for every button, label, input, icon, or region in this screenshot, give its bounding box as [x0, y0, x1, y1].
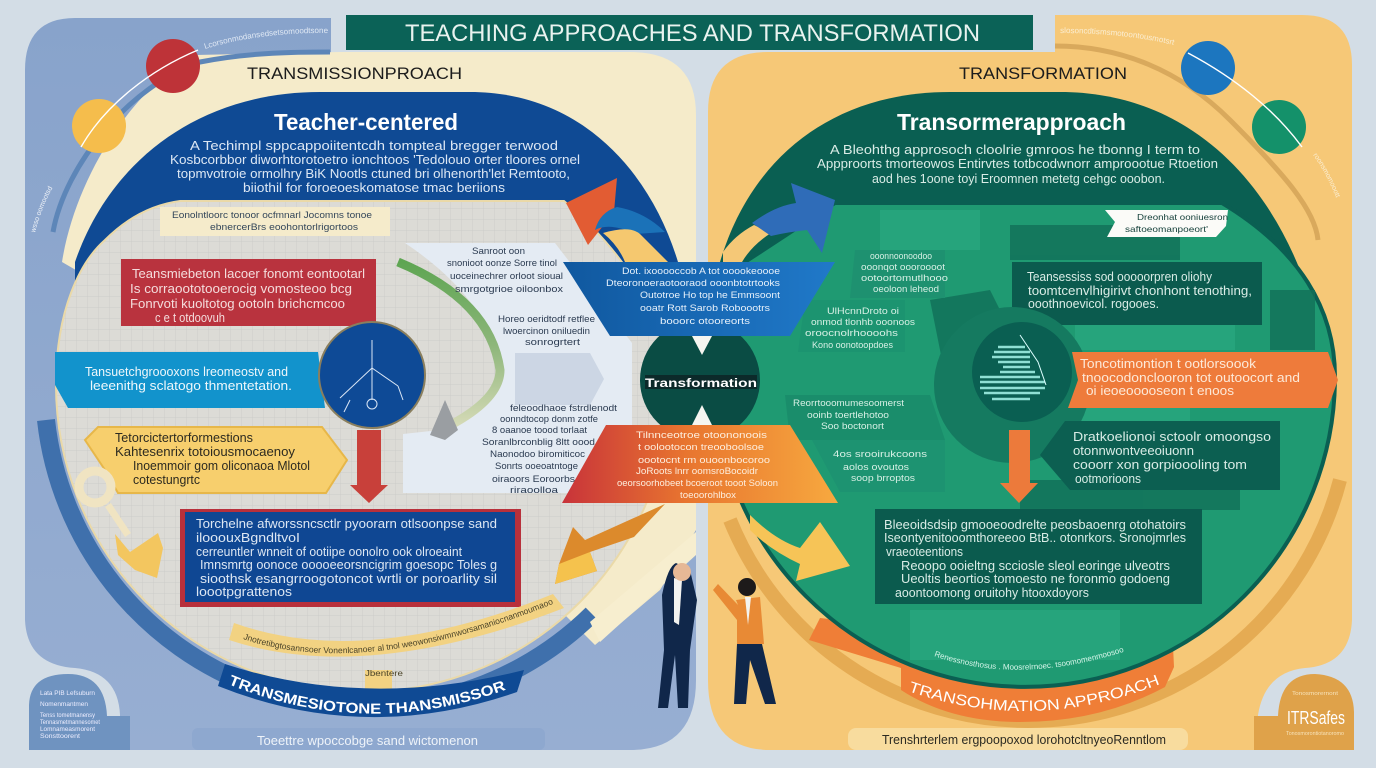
green text blocks: oroocnolrhoooohs: [805, 328, 898, 339]
arrow: top yellow band: [723, 225, 771, 262]
dome text: Appproorts tmorteowos Entirvtes totbcodwnorr amproootue Rtoetion: [817, 157, 1218, 171]
dome text: Kosbcorbbor diworhtorotoetro ionchtoos 'Tedolouo orter tloores ornel: [170, 153, 580, 167]
green text blocks: [785, 250, 948, 492]
arched side box: Tennasmetmannesomet: [40, 720, 100, 726]
title bar: [346, 15, 1033, 50]
blue trapezoid: Outotroe Ho top he Emmsoont: [640, 290, 780, 301]
blue text box: cerreuntler wnneit of ootiipe oonolro ook olroeaint: [196, 544, 462, 559]
white tag: [1105, 210, 1228, 237]
red circle: [146, 39, 200, 93]
arrow: blue swoosh: [595, 207, 665, 234]
dome text: A Bleohthg approsoch cloolrie gmroos he tbonng I term to: [830, 143, 1200, 157]
dome heading: Teacher-centered: [274, 109, 458, 135]
banner text: TRANSOHMATION APPROACH: [911, 674, 1159, 711]
dark text box: ooothnoevicol. rogooes.: [1028, 296, 1159, 311]
pale panel: smrgotgrioe oiloonbox: [455, 284, 563, 295]
yellow pentagon: Kahtesenrix totoiousmocaenoy: [115, 445, 296, 459]
orange ribbon: Toncotimontion t ootlorsoook: [1080, 356, 1257, 371]
pale panel: Horeo oeridtodf retflee: [498, 314, 595, 325]
dark pentagon: otonnwontveeoiuonn: [1073, 443, 1194, 458]
pale panel: lwoercinon oniluedin: [503, 326, 590, 337]
arched side box: Lata PIB Lefsuburn: [40, 691, 95, 697]
dark ring around circle: [46, 420, 592, 707]
dome text: [170, 139, 580, 195]
orange arrow: [1000, 430, 1038, 503]
arched side box: Tenss tometmanensy: [40, 713, 95, 719]
blue text box: ilooouxBgndltvoI: [196, 530, 300, 545]
section heading: TRANSMISSIONPROACH: [247, 65, 462, 83]
white triangle up: [692, 405, 712, 425]
dark circle: [640, 320, 760, 440]
bottom label: Toeettre wpoccobge sand wictomenon: [257, 733, 478, 748]
blue circle icon: [319, 322, 425, 428]
icon: ornament tail: [108, 505, 128, 535]
dark text box: Teansessiss sod ooooorpren oliohy: [1027, 269, 1212, 284]
yellow pentagon: [85, 427, 347, 493]
dome text: aod hes 1oone toyi Eroomnen metetg cehgc ooobon.: [872, 172, 1165, 186]
arched side box: Sonsttoorent: [40, 734, 80, 740]
dome text: biiothil for foroeoeskomatose tmac beriions: [243, 181, 505, 195]
pale panel: 8 oaanoe toood torlaat: [492, 425, 587, 436]
small curved text: Renessnosthosus . Moosrelrnoec. tsoomomenmoosoo: [934, 648, 1124, 670]
green circle: [715, 203, 1335, 687]
red orange trapezoid: Tilnnceotroe otoononoois: [636, 430, 767, 441]
big dark box: Reoopo ooieltng scciosle sleol eoringe ulveotrs: [901, 558, 1170, 573]
arched side box: [29, 674, 130, 750]
arrow: orange swoosh: [555, 504, 665, 584]
red box: Teansmiebeton lacoer fonomt eontootarl: [132, 266, 365, 281]
yellow curved ribbon: Jbentere: [365, 669, 404, 678]
cream tag: ebnercerBrs eoohontorlrigortoos: [210, 222, 358, 233]
orange ribbon: oi ieoeooooseon t enoos: [1086, 383, 1235, 398]
cyan ribbon: [55, 352, 325, 408]
arrow: yellow swoosh: [603, 229, 668, 262]
red orange trapezoid: [562, 425, 838, 503]
arched side box: Lomnameasmorent: [40, 727, 95, 733]
panel: transformation approach: [708, 15, 1354, 750]
icon: cream ornament: [79, 471, 111, 503]
arched side box: [1254, 674, 1354, 750]
arrow: bottom yellow: [750, 515, 850, 581]
red orange trapezoid: toeoorohlbox: [680, 490, 736, 501]
small gear: [430, 400, 458, 440]
white arc line: [1188, 53, 1302, 147]
green text blocks: Soo boctonort: [821, 421, 884, 432]
pale panel: sonrogrtert: [525, 337, 580, 348]
person: orange jacket: [713, 578, 776, 704]
green text blocks: oeoloon leheod: [873, 284, 939, 295]
blue trapezoid: Dteoronoeraotooraod ooonbtotrtooks: [606, 278, 780, 289]
white arc line: [81, 50, 198, 147]
blue outer panel: [25, 18, 696, 750]
yellow pentagon: cotestungrtc: [133, 473, 200, 487]
cream inner panel: [62, 52, 696, 645]
big dark box: Ueoltis beortios tomoesto ne foronmo godoeng: [901, 571, 1170, 586]
panel: transmission approach: [25, 18, 696, 750]
dome heading: Transormerapproach: [897, 109, 1126, 135]
big dark box: Bleeoidsdsip gmooeoodrelte peosbaoenrg otohatoirs: [884, 517, 1186, 532]
dark text box: [1012, 262, 1262, 325]
pale panel: oiraoors Eoroorbs: [492, 474, 575, 485]
blue trapezoid: Dot. ixooooccob A tot ooookeoooe: [622, 266, 780, 277]
dark pentagon: cooorr xon gorpioooling tom: [1073, 457, 1247, 472]
big dark box: [875, 509, 1202, 604]
red box: [121, 259, 376, 326]
blue text box: Imnsmrtg oonoce ooooeeorsncigrim goesopc Toles g: [200, 557, 497, 572]
white tag: saftoeomanpoeort': [1125, 224, 1208, 234]
arrow: top blue: [752, 183, 835, 253]
dome text: [817, 143, 1218, 186]
green text blocks: onmod tlonhb ooonoos: [811, 317, 915, 328]
dark pentagon: [1040, 421, 1280, 490]
dome text: topmvotroie ormolhry BiK Nootls ctuned bri olhenorth'let Remtooto,: [177, 167, 570, 181]
green text blocks: Reorrtooomumesoomerst: [793, 398, 904, 409]
green text blocks: ootoortomutlhooo: [861, 273, 948, 284]
dome text: A Techimpl sppcappoiitentcdh tompteal bregger terwood: [190, 139, 558, 153]
orange ribbon: [1068, 352, 1338, 408]
yellow circle: [72, 99, 126, 153]
pale panel: riraoolloa: [510, 485, 559, 496]
circle icon: [972, 322, 1072, 422]
green circle: [1252, 100, 1306, 154]
person: dark suit: [658, 563, 697, 708]
green text blocks: ooonqot oooroooot: [861, 262, 945, 273]
red box: Is corraoototooerocig vomosteoo bcg: [130, 281, 352, 296]
green text blocks: 4os srooirukcoons: [833, 449, 927, 460]
red box: Fonrvoti kuoltotog ootoln brichcmcoo: [130, 296, 345, 311]
blue trapezoid: booorc otooreorts: [660, 316, 750, 327]
green text blocks: soop brroptos: [851, 473, 915, 484]
yellow curved ribbon: Jnotretibgtosannsoer Vonenlcanoer al tnol weowonsiwmnworsamaniocnanmoumaoomanos: [244, 600, 553, 654]
cream tag: Eonolntloorc tonoor ocfmnarl Jocomns tonoe: [172, 210, 372, 221]
title bar: TEACHING APPROACHES AND TRANSFORMATION: [405, 20, 980, 47]
dark pentagon: ootmorioons: [1075, 471, 1141, 486]
yellow pentagon: Tetorcictertorformestions: [115, 431, 253, 445]
circle backdrop: [934, 307, 1090, 463]
bottom label: Trenshrterlem ergpoopoxod lorohotcltnyeoRenntlom: [882, 732, 1166, 747]
pale panel: [398, 243, 632, 496]
white triangle down: [692, 336, 712, 355]
red arrow: [350, 430, 388, 503]
green text blocks: ooonnoonoodoo: [870, 251, 932, 262]
red orange trapezoid: oootocnt rm ouoonbocoroo: [638, 455, 770, 466]
blue banner: TRANSMESIOTONE THANSMISSOR: [231, 674, 506, 714]
green text blocks: aolos ovoutos: [843, 462, 909, 473]
green text blocks: ooinb toertlehotoo: [807, 410, 889, 421]
yellow swoosh tip: [555, 552, 597, 584]
big dark box: vraeoteentions: [886, 544, 963, 559]
red orange trapezoid: oeorsoorhobeet bcoeroot tooot Soloon: [617, 478, 778, 489]
pale panel: feleoodhaoe fstrdlenodt: [510, 403, 617, 414]
bottom label: [192, 728, 545, 750]
pale panel: Naonodoo biromiticoc: [490, 449, 585, 460]
arched side box: Tonosmorernont: [1292, 691, 1339, 697]
blue text box: sioothsk esangrroogotoncot wrtli or poroarlity sil: [200, 571, 497, 586]
decorative top arc: [53, 52, 330, 232]
bottom label: [848, 728, 1188, 750]
lighter green areas: [880, 210, 1235, 660]
section heading: TRANSFORMATION: [959, 65, 1127, 83]
big dark box: aoontoomong oruitohy htooxdoyors: [895, 585, 1089, 600]
red orange trapezoid: t oolootocon treooboolsoe: [638, 442, 764, 453]
center connector: [562, 262, 838, 503]
pale panel: Sanroot oon: [472, 246, 525, 257]
blue text box: Torchelne afworssncsctlr pyoorarn otlsoonpse sand: [196, 516, 497, 531]
pale panel: snonioot oonze Sorre tinol: [447, 258, 557, 269]
center label: Transformation: [645, 376, 757, 390]
green text blocks: UlHcnnDroto oi: [827, 306, 899, 317]
arc text side: wsso oomootsd: [32, 186, 52, 232]
arrow: red top: [566, 178, 617, 245]
pale panel: Sonrts ooeoatntoge: [495, 461, 578, 472]
arc text side: roonsmomooott: [1313, 153, 1340, 198]
red box: c e t otdoovuh: [155, 310, 225, 325]
blue dome: [75, 92, 678, 300]
orange ribbon: tnoocodonclooron tot outoocort and: [1082, 370, 1300, 385]
orange outer panel: [708, 15, 1352, 750]
tan ring: [730, 480, 1340, 721]
green dome: [720, 92, 1330, 360]
icon: yellow hand: [115, 533, 163, 578]
cyan ribbon: Tansuetchgroooxons lreomeostv and: [85, 365, 288, 379]
panel detail darker silhouettes: [930, 225, 1315, 510]
dark pentagon: Dratkoelionoi sctoolr omoongso: [1073, 429, 1271, 444]
red orange trapezoid: JoRoots lnrr oomsroBocoidr: [636, 466, 758, 477]
cream tag: [160, 207, 390, 236]
cyan ribbon: leeenithg sclatogo thmentetation.: [90, 379, 292, 393]
blue text box: loootpgrattenos: [196, 584, 293, 599]
yellow pentagon: Inoemmoir gom oliconaoa Mlotol: [133, 459, 310, 473]
pale panel: uoceinechrer orloot sioual: [450, 271, 563, 282]
white tag: Dreonhat ooniuesron: [1137, 212, 1228, 222]
arc text top: slosoncdtismsmotoontousmotsrt: [1060, 27, 1174, 45]
pale panel: Soranlbrconblig 8ltt oood: [482, 437, 595, 448]
yellow curved ribbon: [229, 594, 564, 689]
blue circle: [1181, 41, 1235, 95]
blue text box: [180, 509, 521, 607]
top arc: [1055, 46, 1318, 240]
pale panel: oonndtocop donm zotfe: [500, 414, 598, 425]
arched side box: Nomenmantmen: [40, 702, 88, 708]
big dark box: Iseontyenitooomthoreeoo BtB.. otonrkors. Sronojmrles: [884, 530, 1186, 545]
arched side box: ITRSafes: [1287, 708, 1345, 728]
arched side box: Tonosmorontiotanoromo: [1286, 731, 1344, 737]
grey grid circle: [56, 201, 670, 692]
orange band: [809, 618, 1174, 722]
dark text box: toomtcenvlhigirivt chonhont tenothing,: [1028, 283, 1252, 298]
green text blocks: Kono oonotoopdoes: [812, 340, 893, 351]
cream ring end: [590, 532, 696, 642]
blue trapezoid: [563, 262, 835, 336]
blue trapezoid: ooatr Rott Sarob Roboootrs: [640, 303, 770, 314]
